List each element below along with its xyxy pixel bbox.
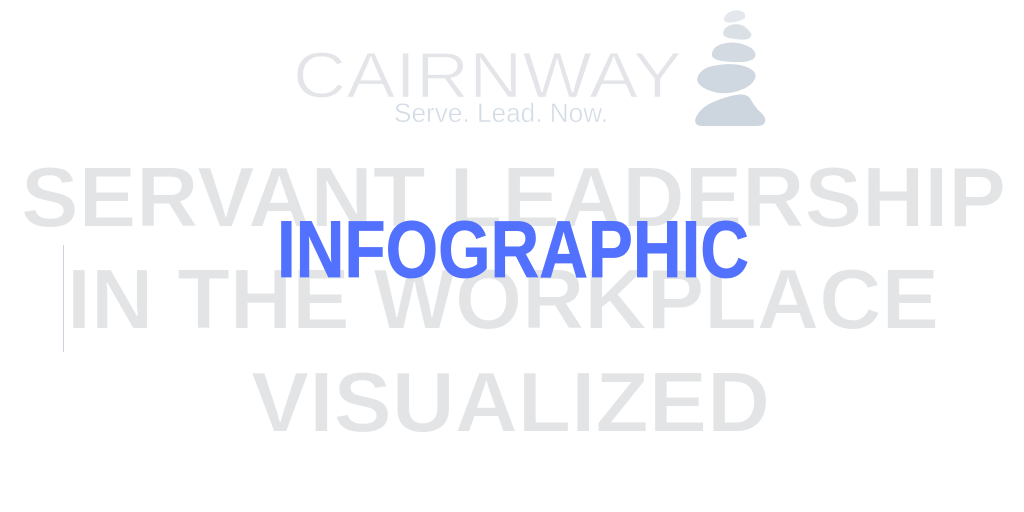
overlay title: INFOGRAPHIC: INFOGRAPHIC — [277, 205, 749, 295]
logo: Cairnway wordmark: CAIRNWAY — [293, 38, 682, 112]
logo: tagline: Serve. Lead. Now. — [394, 98, 608, 128]
heading line 3: VISUALIZED — [251, 356, 770, 450]
heading line 2: IN THE WORKPLACE — [67, 252, 939, 348]
vertical rule — [63, 245, 64, 352]
heading line 1: SERVANT LEADERSHIP — [21, 150, 1006, 246]
logo: stacked stones icon — [695, 10, 765, 126]
